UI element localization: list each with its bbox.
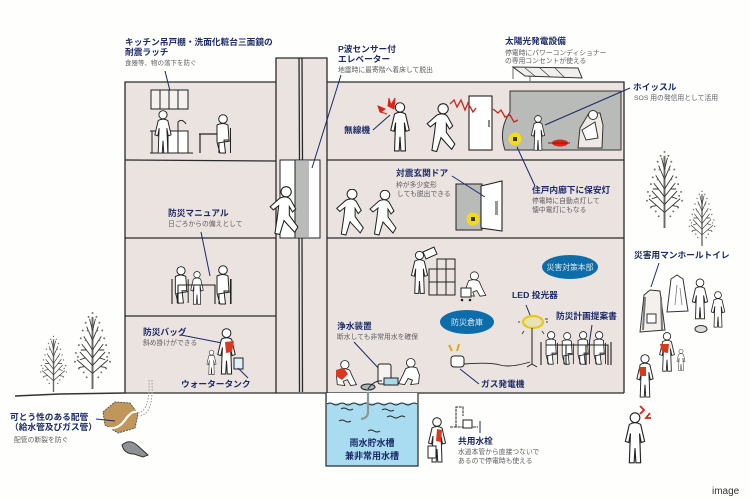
- shared water tap: 共用水栓: [458, 435, 493, 446]
- family at table: [172, 232, 231, 304]
- flexible piping: （給水管及びガス管）: [10, 421, 97, 432]
- water purifier: [336, 320, 419, 390]
- mother, child and tank: ウォータータンク: [181, 378, 250, 389]
- security light hallway: 住戸内廊下に保安灯: [532, 184, 610, 195]
- security light hallway: 懐中電灯にもなる: [532, 205, 586, 214]
- gas generator: ガス発電機: [481, 378, 525, 389]
- seismic door: 対震玄関ドア: [396, 167, 448, 178]
- shared water tap: あるので停電時も使える: [458, 456, 533, 465]
- heading: disaster bag: 斜め掛けができる: [143, 338, 197, 347]
- solar panel: [505, 35, 607, 81]
- meeting: [541, 310, 617, 365]
- heading: kitchen latch: [125, 36, 273, 67]
- evacuees right: [625, 333, 685, 463]
- heading: elevator: エレベーター: [338, 53, 390, 64]
- water purifier: 断水しても非常用水を確保: [337, 332, 418, 341]
- right trees: [646, 151, 715, 246]
- security light hallway: 停電時に自動点灯して: [532, 196, 600, 205]
- label: disaster HQ: [542, 255, 598, 279]
- LED floodlight: [512, 289, 558, 367]
- label: disaster HQ: 災害対策本部: [547, 262, 594, 272]
- ground and trees: [15, 312, 125, 396]
- mother, child and tank: [181, 329, 250, 389]
- heading: elevator: 地震時に最寄階へ着床して脱出: [338, 65, 433, 74]
- running person and door: [427, 96, 518, 151]
- gas generator: [449, 344, 530, 389]
- heading: elevator: [312, 43, 433, 168]
- rainwater tank: 兼非常用水槽: [345, 450, 399, 461]
- label: disaster storehouse: 防災倉庫: [451, 317, 483, 327]
- whistle: child and woman: SOS 用の発信用として活用: [634, 93, 718, 102]
- solar panel: 停電時にパワーコンディショナー: [505, 48, 607, 57]
- heading: kitchen latch: 食器等、物の落下を防ぐ: [125, 58, 196, 67]
- heading: manual: [168, 207, 243, 228]
- panel: elevator: [270, 160, 320, 238]
- security light hallway: [508, 132, 610, 214]
- flexible piping: [10, 380, 152, 457]
- panel: gray inner room: [502, 91, 621, 150]
- heading: disaster bag: [143, 326, 197, 347]
- rainwater tank: 雨水貯水槽: [349, 437, 395, 448]
- heading: kitchen latch: キッチン吊戸棚・洗面化粧台三面鏡の: [125, 36, 273, 47]
- label: disaster storehouse: [440, 310, 494, 334]
- radio man: [344, 98, 409, 151]
- heading: manual: 日ごろからの備えとして: [168, 219, 243, 228]
- whistle: child and woman: [531, 82, 718, 150]
- shared water tap: [428, 407, 540, 465]
- second floor runners: [337, 189, 396, 235]
- radio man: 無線機: [344, 124, 370, 135]
- shared water tap: 水道本管から直接つないで: [458, 447, 540, 456]
- seismic door: しても脱出できる: [397, 189, 451, 198]
- manhole toilet: [634, 249, 730, 332]
- heading: kitchen latch: 耐震ラッチ: [125, 46, 169, 57]
- heading: disaster bag: 防災バッグ: [143, 326, 187, 337]
- seismic door: 枠が多少変形: [396, 180, 437, 189]
- meeting: 防災計画提案書: [556, 310, 617, 321]
- storage: stacking shelves: [411, 247, 486, 301]
- kitchen illustration: [150, 71, 230, 153]
- rainwater tank: [326, 392, 418, 466]
- credit: image: [712, 486, 740, 497]
- flexible piping: 可とう性のある配管: [10, 411, 88, 422]
- panel: building floors: [125, 58, 624, 393]
- seismic door: [396, 167, 502, 231]
- heading: manual: 防災マニュアル: [168, 207, 229, 218]
- manhole toilet: 災害用マンホールトイレ: [634, 249, 730, 260]
- solar panel: の専用コンセントが使える: [505, 56, 586, 65]
- flexible piping: 配管の断裂を防ぐ: [14, 435, 68, 444]
- water purifier: 浄水装置: [337, 320, 372, 331]
- LED floodlight: LED 投光器: [512, 289, 558, 300]
- heading: elevator: P波センサー付: [338, 43, 396, 54]
- solar panel: 太陽光発電設備: [505, 35, 566, 46]
- whistle: child and woman: ホイッスル: [633, 82, 677, 92]
